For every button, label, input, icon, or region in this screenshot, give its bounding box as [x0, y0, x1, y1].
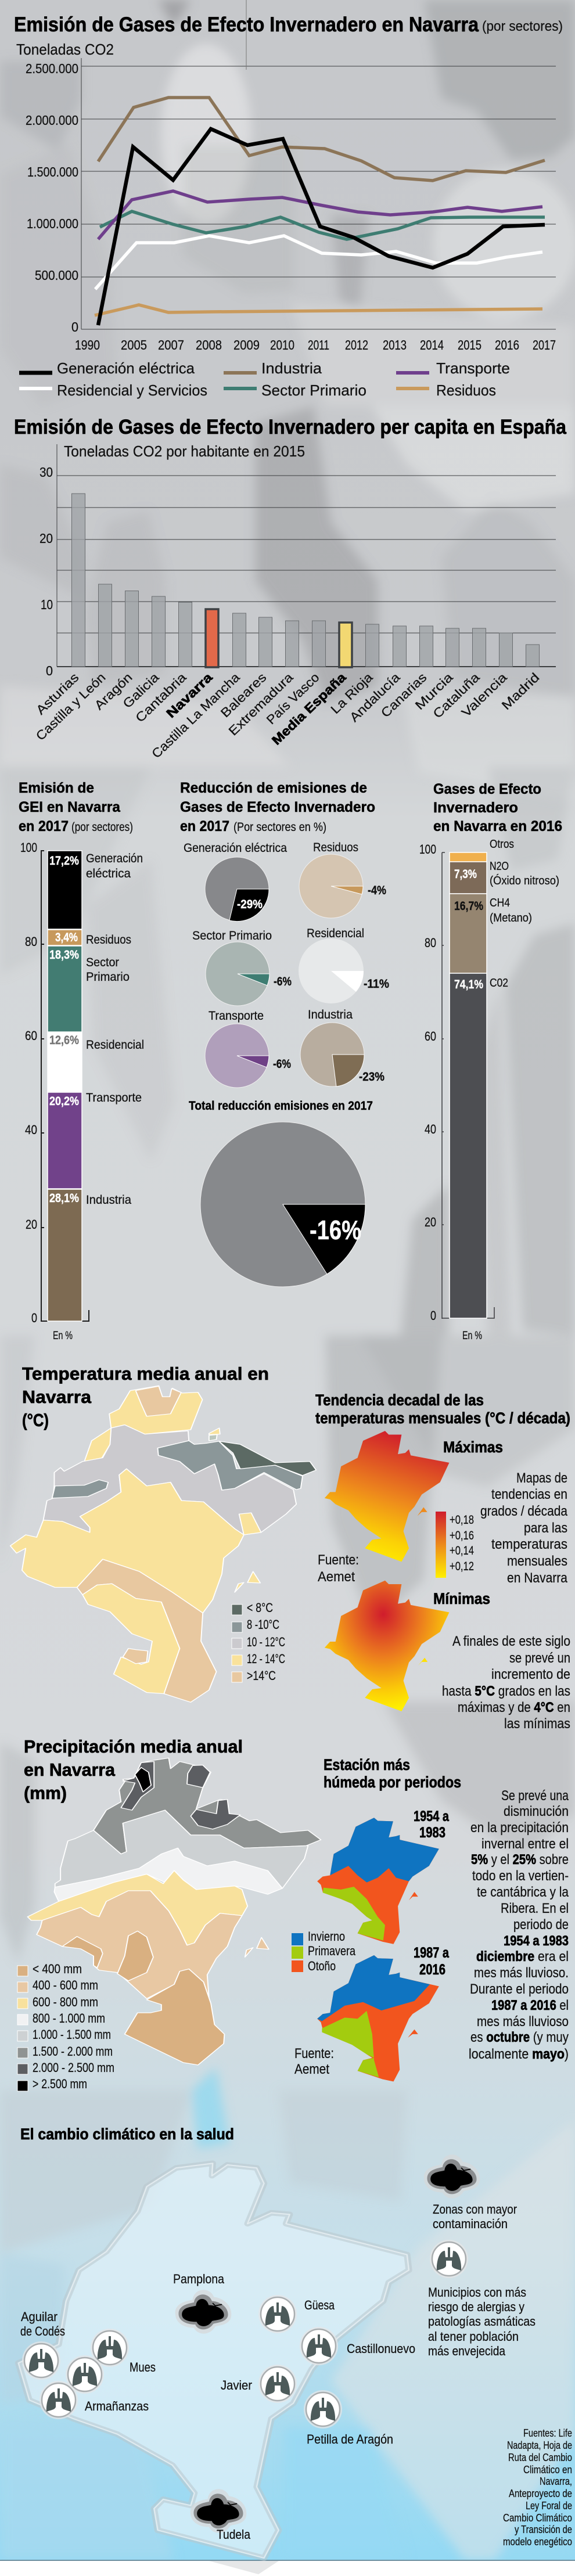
period label 1954 — [414, 1808, 450, 1841]
heading: en 2017 — [19, 818, 69, 834]
panel: per capita bar chart — [14, 416, 566, 761]
region labels: Galicia — [120, 670, 162, 711]
heading: en 2017 — [180, 818, 229, 834]
legend: 8 -10°C — [247, 1617, 279, 1632]
segment values — [49, 854, 79, 1205]
icon: lungs Petilla de Aragón — [304, 2390, 342, 2429]
sector labels: Industria — [86, 1193, 131, 1207]
grid lines and axis — [81, 0, 556, 329]
icon: lungs Javier — [258, 2365, 297, 2403]
axis labels: 80 — [25, 934, 37, 949]
sector labels — [86, 852, 144, 1207]
axis unit: Toneladas CO2 — [16, 41, 114, 58]
region labels: País Vasco — [264, 670, 322, 727]
lung icons — [22, 2240, 468, 2429]
legend — [17, 1962, 114, 2091]
region labels: Valencia — [459, 670, 510, 720]
pie: Generación eléctrica: -29% — [237, 898, 263, 911]
map: temperature zones — [10, 1386, 316, 1702]
icon: cloud legend — [424, 2154, 480, 2199]
pie: Industria: Industria — [308, 1008, 353, 1021]
values: 74,1% — [454, 978, 483, 991]
panel: emission reduction pies — [180, 780, 389, 1287]
x axis labels: 2008 — [196, 337, 222, 352]
stacked bar segments — [450, 852, 487, 1318]
axis labels: 40 — [425, 1122, 436, 1136]
region labels: Extremadura — [226, 670, 296, 739]
region labels — [33, 670, 542, 761]
legend: allergy risk — [428, 2285, 536, 2358]
color scale: +0,16 — [450, 1529, 474, 1542]
heading: Reducción de emisiones de — [180, 780, 367, 796]
note: rainfall decline: localmente mayo) — [469, 2046, 569, 2062]
sector labels: Sector — [86, 956, 119, 969]
x axis labels: 2011 — [308, 337, 329, 352]
heading: (°C) — [22, 1410, 49, 1430]
panel: health map — [19, 2125, 572, 2574]
icon: lungs Castillonuevo — [300, 2327, 338, 2365]
icon: lungs Armañanzas — [39, 2381, 78, 2419]
heading — [24, 1736, 243, 1803]
pie: Industria — [300, 1008, 384, 1086]
town labels — [20, 2272, 415, 2542]
town labels: Mues — [130, 2360, 156, 2374]
segment values: 3,4% — [55, 931, 78, 944]
region labels: Navarra — [163, 670, 215, 721]
pie: Transporte: Transporte — [209, 1009, 264, 1023]
unit: En % — [53, 1330, 73, 1342]
legend: Transporte — [436, 359, 510, 377]
y labels: 0 — [46, 663, 53, 678]
axis labels: 0 — [430, 1308, 436, 1323]
legend — [19, 359, 510, 399]
legend: 400 - 600 mm — [33, 1978, 98, 1992]
axis labels — [20, 840, 37, 1325]
segment values: 28,1% — [49, 1192, 79, 1205]
icon: lungs middle — [66, 2355, 104, 2394]
gas labels: (Óxido nitroso) — [490, 874, 559, 887]
x axis labels: 1990 — [75, 337, 100, 352]
note: trend maps: mensuales — [507, 1553, 567, 1569]
axis labels: 40 — [25, 1122, 37, 1137]
legend: allergy risk: al tener población — [428, 2329, 519, 2344]
label: máximas: Máximas — [443, 1438, 503, 1456]
pie: Residuos: -4% — [368, 884, 386, 897]
heading: (mm) — [24, 1783, 67, 1803]
x axis labels: 2010 — [270, 337, 294, 352]
cloud icons — [175, 2154, 480, 2533]
segment values: 17,2% — [49, 854, 79, 868]
region labels: Cataluña — [430, 670, 483, 721]
panel: temperature map — [10, 1363, 316, 1702]
unit: En % — [462, 1330, 482, 1342]
gas labels: N2O — [490, 860, 509, 873]
color scale — [436, 1512, 474, 1578]
note: rainfall decline: 5% y el 25% sobre — [471, 1852, 569, 1868]
heading: GEI en Navarra — [19, 799, 121, 815]
note: rainfall decline: diciembre era el — [476, 1949, 569, 1965]
y axis labels — [26, 61, 78, 334]
panel: emissions line chart — [14, 0, 563, 399]
legend: Sector Primario — [261, 382, 366, 399]
heading: en Navarra en 2016 — [433, 818, 562, 834]
region labels: Media España — [269, 670, 349, 748]
note: trend maps: en Navarra — [507, 1570, 568, 1586]
legend: < 8°C — [247, 1600, 273, 1615]
sources — [503, 2427, 572, 2548]
heading: El cambio climático en la salud — [20, 2125, 234, 2143]
legend: allergy risk: Municipios con más — [428, 2285, 526, 2300]
icon: lungs Aguilar de Codés — [22, 2341, 60, 2380]
x axis labels: 2012 — [345, 337, 368, 352]
legend: 600 - 800 mm — [33, 1995, 98, 2009]
icon: cloud Tudela — [191, 2489, 246, 2533]
source: Fuente: — [318, 1552, 359, 1568]
note: rainfall decline: es octubre (y muy — [470, 2030, 569, 2045]
axis labels: 60 — [425, 1029, 436, 1044]
panel: decadal temperature trend — [315, 1391, 570, 1732]
heading — [180, 780, 375, 834]
axis — [442, 852, 494, 1319]
x axis labels: 2013 — [383, 337, 407, 352]
map: 1954-1983 — [317, 1818, 439, 1944]
town labels: Javier — [221, 2378, 252, 2392]
x axis labels: 2016 — [495, 337, 519, 352]
note: rainfall decline: disminución — [504, 1804, 569, 1819]
pie: Sector Primario — [192, 929, 292, 1006]
heading: (Por sectores en %) — [233, 821, 326, 834]
town labels: Aguilar — [21, 2309, 58, 2324]
period label 1954: 1983 — [419, 1825, 445, 1841]
town labels: Petilla de Aragón — [307, 2432, 393, 2447]
town labels: Tudela — [217, 2527, 251, 2542]
values: 16,7% — [454, 900, 483, 913]
y labels — [39, 465, 53, 678]
legend: < 400 mm — [33, 1962, 82, 1976]
bars — [72, 494, 539, 667]
x axis labels: 2015 — [458, 337, 481, 352]
gas labels: Otros — [490, 838, 514, 851]
pie: total reduction — [189, 1099, 373, 1287]
legend: 1.500 - 2.000 mm — [33, 2044, 113, 2059]
legend: 12 - 14°C — [247, 1652, 285, 1666]
heading: Estación más — [324, 1756, 410, 1773]
axis labels: 20 — [425, 1215, 436, 1229]
legend: Invierno — [308, 1929, 345, 1944]
heading — [22, 1363, 269, 1430]
axis labels — [419, 842, 436, 1323]
axis labels: 100 — [419, 842, 436, 857]
pie: Residencial: Residencial — [307, 927, 364, 940]
legend: Primavera — [308, 1944, 356, 1958]
map: Navarra outline — [19, 2163, 409, 2558]
heading: Precipitación media anual — [24, 1736, 243, 1757]
note: trend maps — [480, 1470, 568, 1586]
legend: allergy risk: riesgo de alergias y — [428, 2300, 524, 2314]
axis labels: 20 — [26, 1217, 37, 1232]
legend: pollution — [433, 2202, 517, 2231]
period label 1987 — [414, 1945, 450, 1978]
grid and axis — [57, 444, 556, 667]
y labels: 20 — [39, 531, 53, 546]
pie: Sector Primario: Sector Primario — [192, 929, 272, 942]
values: 7,3% — [454, 868, 477, 881]
x axis labels: 2017 — [533, 337, 556, 352]
region labels: Castilla y León — [33, 670, 108, 743]
legend: 1.000 - 1.500 mm — [33, 2027, 111, 2042]
heading: Navarra — [22, 1387, 92, 1407]
region labels: Aragón — [92, 670, 135, 713]
heading: Temperatura media anual en — [22, 1363, 269, 1384]
pie: Generación eléctrica: Generación eléctrica — [184, 841, 287, 855]
town labels: Pamplona — [173, 2272, 225, 2286]
map: maximum temperatures — [325, 1431, 449, 1562]
x axis labels: 2007 — [158, 337, 184, 352]
y labels: 10 — [41, 597, 53, 612]
source — [318, 1552, 359, 1585]
legend: allergy risk: patologías asmáticas — [428, 2314, 536, 2329]
y axis labels: 2.000.000 — [26, 113, 78, 128]
note: rainfall decline — [469, 1788, 569, 2062]
region labels: Andalucía — [347, 670, 403, 725]
period label 1987: 2016 — [419, 1962, 445, 1978]
data lines — [95, 98, 545, 325]
period label 1954: 1954 a — [414, 1808, 450, 1825]
gas labels — [490, 838, 559, 990]
heading: Invernadero — [433, 800, 518, 816]
y labels: 30 — [39, 465, 53, 480]
town labels: Armañanzas — [85, 2399, 149, 2413]
x axis labels — [75, 337, 556, 352]
x axis labels: 2005 — [121, 337, 147, 352]
heading: (por sectores) — [71, 821, 133, 834]
legend: 2.000 - 2.500 mm — [33, 2060, 114, 2075]
segment values: 12,6% — [49, 1034, 79, 1047]
pie: total reduction: -16% — [310, 1215, 361, 1245]
icon: cloud Pamplona — [175, 2290, 231, 2334]
gas labels: CH4 — [490, 897, 510, 909]
sector labels: Generación — [86, 852, 143, 865]
pie: total reduction: Total reducción emisiones en 2017 — [189, 1099, 373, 1113]
title: emissions by sector: Emisión de Gases de Efecto Invernadero en Navarra — [14, 13, 479, 36]
town labels: Castillonuevo — [347, 2341, 415, 2356]
region labels: Asturias — [33, 670, 81, 718]
axis labels: 100 — [20, 840, 37, 855]
heading: Gases de Efecto Invernadero — [180, 799, 375, 815]
axis labels: 60 — [25, 1028, 37, 1043]
heading — [19, 780, 133, 834]
heading: húmeda por periodos — [324, 1773, 461, 1791]
y axis labels: 0 — [71, 319, 78, 334]
heading: en Navarra — [24, 1760, 116, 1780]
region labels: Canarias — [378, 670, 429, 720]
legend: > 2.500 mm — [33, 2077, 87, 2091]
color scale: +0,14 — [450, 1544, 474, 1557]
pie: Sector Primario: -6% — [274, 975, 292, 988]
sector labels: Residencial — [86, 1038, 144, 1052]
y axis labels: 1.000.000 — [27, 216, 78, 231]
note: trend maps: temperaturas — [491, 1537, 567, 1552]
color scale: +0,12 — [450, 1560, 474, 1573]
source: Aemet — [294, 2061, 329, 2077]
faint outline tip — [209, 2561, 279, 2574]
stacked bar segments — [48, 851, 82, 1321]
heading: Tendencia decadal de las — [315, 1391, 484, 1409]
axis — [41, 850, 89, 1322]
segment values: 20,2% — [49, 1095, 79, 1108]
legend: pollution: contaminación — [433, 2217, 508, 2231]
region labels: Cantabria — [132, 670, 189, 725]
map: minimum temperatures — [325, 1581, 449, 1711]
map: precipitation zones — [27, 1758, 321, 2065]
pie: Transporte: -6% — [273, 1057, 291, 1071]
source: Aemet — [318, 1569, 355, 1585]
legend: 800 - 1.000 mm — [33, 2011, 105, 2025]
heading — [315, 1391, 570, 1427]
axis labels: 0 — [31, 1311, 37, 1325]
pie: Industria: -23% — [359, 1070, 384, 1084]
note: end of century — [442, 1634, 570, 1732]
heading: Gases de Efecto — [433, 781, 541, 797]
pie: Transporte — [205, 1009, 291, 1088]
town labels: de Codés — [20, 2324, 65, 2338]
panel: GEI stacked bar — [19, 780, 144, 1342]
sector labels: Residuos — [86, 933, 131, 947]
note: rainfall decline: 1987 a 2016 el — [491, 1998, 569, 2013]
region labels: Baleares — [218, 670, 269, 720]
color scale: +0,18 — [450, 1513, 474, 1527]
note: trend maps: para las — [524, 1520, 567, 1536]
legend: Residencial y Servicios — [57, 382, 207, 399]
label: mínimas: Mínimas — [433, 1590, 490, 1607]
pie: Residuos — [299, 841, 386, 918]
chart subtitle: Toneladas CO2 por habitante en 2015 — [64, 442, 305, 460]
panel: precipitation map — [17, 1736, 321, 2091]
heading: Emisión de — [19, 780, 94, 796]
icon: lungs legend — [430, 2240, 468, 2278]
pie: Residencial — [299, 927, 389, 1003]
heading — [324, 1756, 461, 1791]
source — [294, 2046, 334, 2077]
period label 1987: 1987 a — [414, 1945, 450, 1961]
y axis labels: 2.500.000 — [26, 61, 78, 76]
y axis labels: 500.000 — [35, 268, 78, 283]
icon: lungs Mues — [91, 2329, 129, 2367]
segment values: 18,3% — [49, 948, 79, 962]
region labels: Castilla La Mancha — [149, 670, 243, 761]
title: emissions by sector: (por sectores) — [482, 19, 563, 34]
heading — [433, 781, 562, 834]
sector labels: Transporte — [86, 1091, 142, 1104]
map: 1987-2016 — [317, 1955, 439, 2082]
region labels: La Rioja — [328, 670, 376, 717]
legend: Generación eléctrica — [57, 359, 195, 377]
legend — [292, 1929, 356, 1973]
note: end of century: máximas y de 4°C en — [458, 1700, 570, 1715]
legend — [232, 1600, 285, 1683]
x axis labels: 2009 — [233, 337, 260, 352]
legend: pollution: Zonas con mayor — [433, 2202, 517, 2217]
legend: Industria — [261, 359, 322, 377]
pie: Residuos: Residuos — [313, 841, 358, 854]
legend: Otoño — [308, 1959, 336, 1973]
region labels: Murcia — [412, 670, 456, 713]
x axis labels: 2014 — [420, 337, 444, 352]
legend: 10 - 12°C — [247, 1635, 285, 1649]
legend: >14°C — [247, 1668, 276, 1683]
values — [454, 868, 483, 991]
icon: lungs Güesa — [258, 2295, 297, 2333]
gas labels: (Metano) — [490, 912, 532, 924]
panel: greenhouse gases stacked bar — [419, 781, 562, 1342]
town labels: Güesa — [304, 2298, 335, 2312]
source: Fuente: — [294, 2046, 334, 2061]
sector labels: eléctrica — [86, 867, 131, 880]
pie: Residencial: -11% — [364, 977, 389, 991]
legend: allergy risk: más envejecida — [428, 2344, 506, 2358]
pie: Generación eléctrica — [184, 841, 287, 922]
sector labels: Primario — [86, 970, 130, 984]
y axis labels: 1.500.000 — [27, 164, 78, 179]
gas labels: C02 — [490, 977, 508, 990]
region labels: Madrid — [499, 670, 542, 713]
legend: Residuos — [436, 382, 496, 399]
axis labels: 80 — [425, 936, 436, 950]
panel: wettest season — [292, 1756, 569, 2082]
